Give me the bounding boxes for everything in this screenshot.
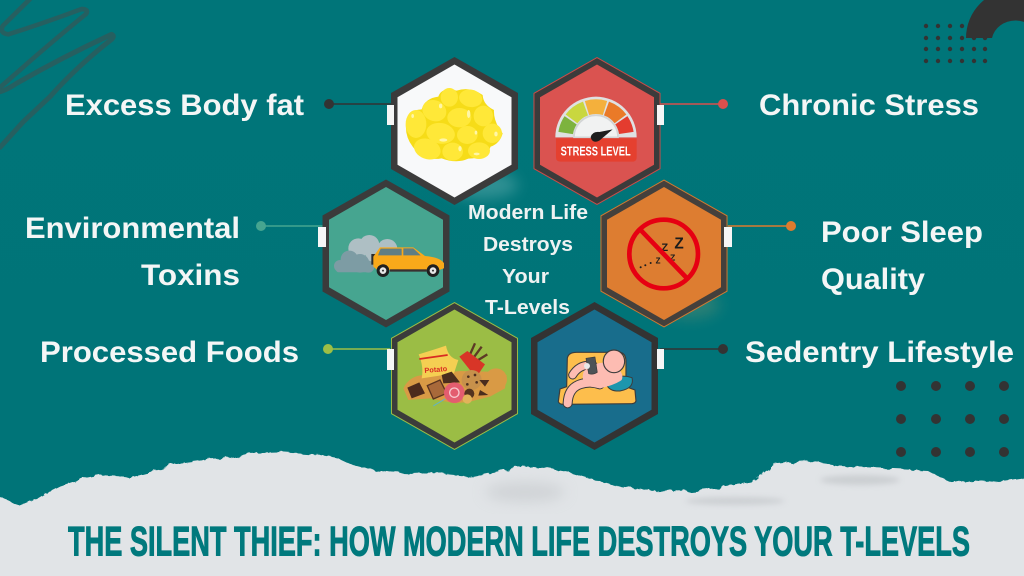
icon: junk food pile (403, 343, 507, 406)
centre heading: Modern Life (468, 201, 588, 224)
label: poor sleep quality: Quality (821, 263, 926, 296)
centre heading (468, 201, 588, 319)
hexagon: chronic stress (534, 57, 664, 205)
icon: car with exhaust smoke (334, 235, 444, 277)
connector: excess body fat (324, 99, 392, 109)
scribble decoration (0, 0, 113, 147)
label: poor sleep quality (821, 216, 983, 296)
label: chronic stress: Chronic Stress (759, 89, 979, 122)
decorative dots lower right (896, 381, 1009, 457)
icon: no sleep symbol: Z (674, 236, 684, 253)
hexagon: poor sleep (600, 180, 732, 328)
icon: person on couch (558, 350, 636, 404)
tab (657, 349, 664, 369)
connector: processed foods (323, 344, 390, 354)
icon: stress gauge (555, 97, 637, 162)
centre heading: Your (502, 265, 549, 288)
hexagon: processed foods (387, 302, 518, 450)
icon: no sleep symbol: Z (670, 253, 676, 263)
decorative dots top right (924, 24, 987, 63)
tab (657, 105, 664, 125)
icon: no sleep symbol (629, 220, 698, 288)
label: environmental toxins: Toxins (141, 259, 240, 292)
connector: environmental toxins (256, 221, 324, 231)
torn paper footer (0, 452, 1024, 576)
tab (724, 227, 732, 247)
icon: fat cells (406, 88, 503, 163)
hexagon: excess body fat (387, 57, 518, 205)
label: environmental toxins: Environmental (25, 212, 240, 245)
label: poor sleep quality: Poor Sleep (821, 216, 983, 249)
tab (318, 227, 326, 247)
tab (387, 349, 394, 370)
hexagon: sedentary lifestyle (531, 302, 664, 450)
icon: junk food pile: Potato (424, 364, 448, 375)
tab (387, 105, 394, 125)
icon: stress gauge: STRESS LEVEL (561, 144, 631, 159)
label: environmental toxins (25, 212, 240, 292)
label: processed foods: Processed Foods (40, 336, 299, 369)
connector: poor sleep (728, 221, 796, 231)
connector: chronic stress (660, 99, 728, 109)
decorative arc top right (966, 0, 1024, 38)
label: excess body fat: Excess Body fat (65, 89, 304, 122)
icon: no sleep symbol: Z (661, 242, 668, 254)
needle (591, 129, 613, 142)
label: sedentary lifestyle: Sedentry Lifestyle (745, 336, 1014, 369)
centre heading: Destroys (483, 233, 573, 256)
centre heading: T-Levels (485, 296, 570, 319)
icon: no sleep symbol: Z (656, 256, 661, 265)
hexagon: environmental toxins (318, 180, 450, 328)
connector: sedentary (660, 344, 728, 354)
